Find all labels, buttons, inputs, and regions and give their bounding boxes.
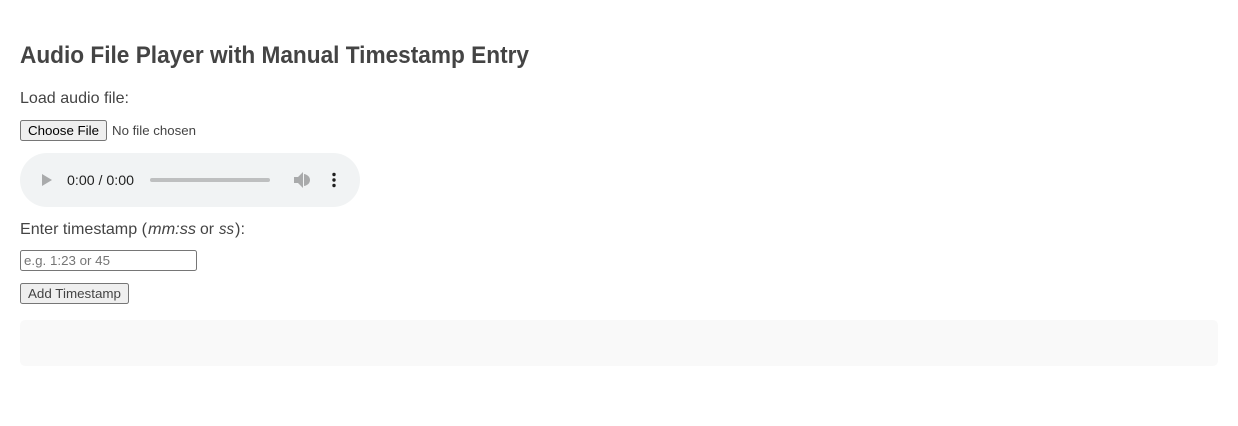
button: choose file: Choose File (28, 123, 99, 138)
file status text: No file chosen (112, 123, 196, 138)
audio player (20, 153, 360, 207)
icon: play (42, 174, 52, 186)
time display: 0:00 / 0:00 (67, 172, 134, 188)
file input (20, 120, 196, 140)
label: enter timestamp: mm:ss (148, 221, 196, 238)
label: enter timestamp (20, 221, 245, 238)
icon: more options (332, 173, 336, 187)
timestamp input: e.g. 1:23 or 45 (24, 253, 110, 268)
label: enter timestamp: ): (235, 221, 245, 238)
progress track (150, 178, 270, 182)
label: enter timestamp: ss (219, 221, 234, 238)
button: add timestamp: Add Timestamp (28, 286, 121, 301)
icon: volume (294, 172, 310, 188)
label: enter timestamp: or (200, 221, 215, 238)
button: add timestamp (20, 284, 128, 304)
button: choose file (20, 120, 106, 140)
panel: timestamp list (20, 320, 1218, 366)
title: Audio File Player with Manual Timestamp Entry (20, 42, 530, 69)
timestamp input (20, 250, 196, 270)
label: enter timestamp: Enter timestamp ( (20, 221, 148, 238)
label: load audio file: Load audio file: (20, 90, 129, 107)
